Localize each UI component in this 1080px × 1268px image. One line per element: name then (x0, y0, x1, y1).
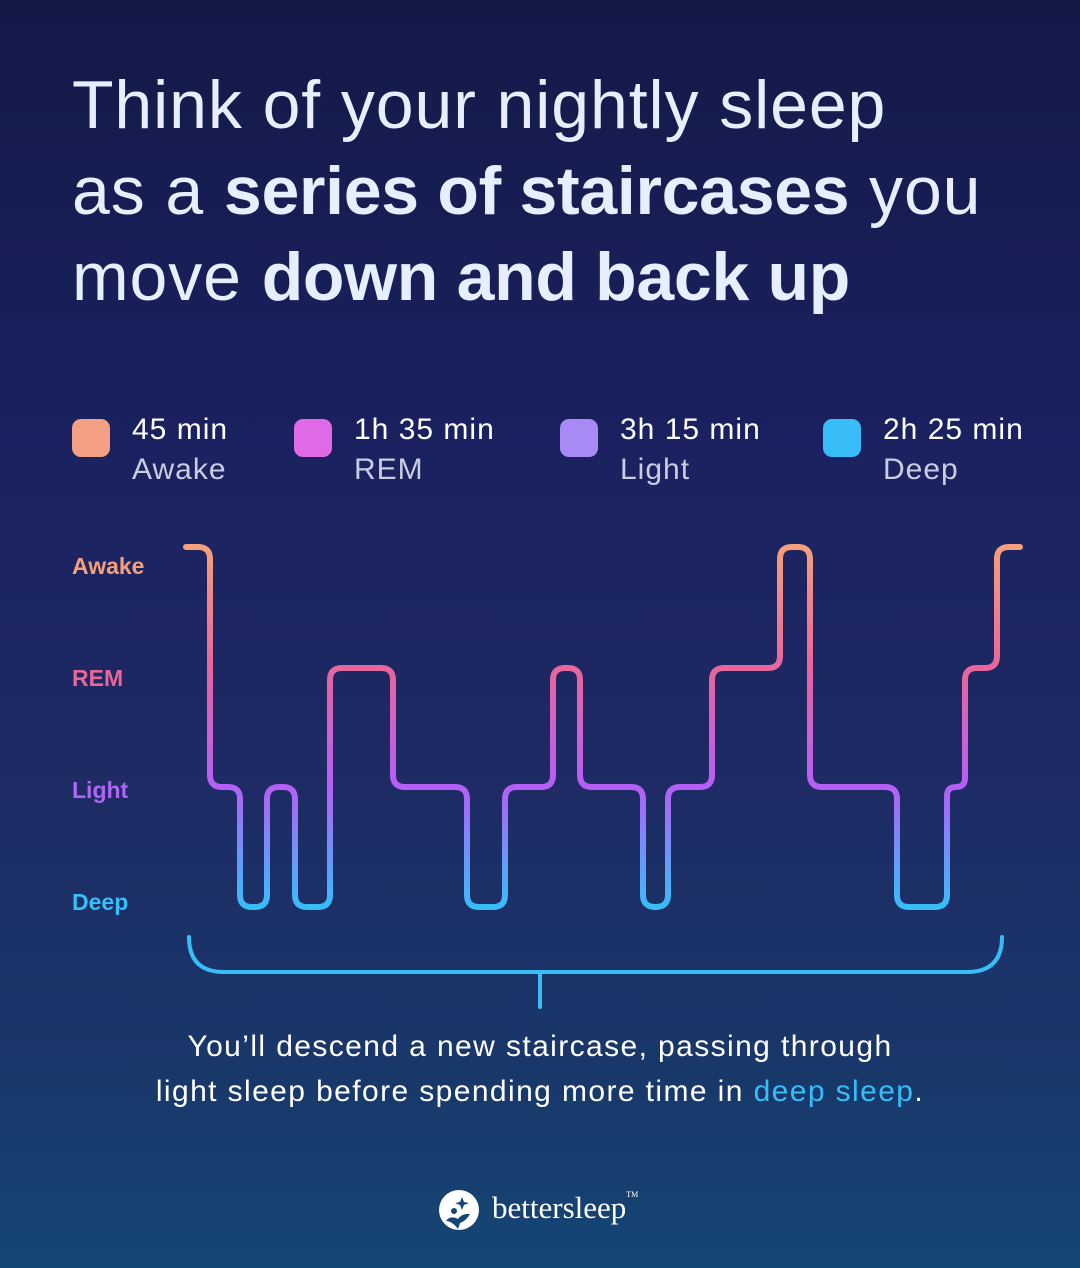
legend: deep (823, 413, 1024, 486)
legend: REM (294, 413, 495, 486)
caption (156, 1030, 924, 1108)
logo (439, 1190, 638, 1230)
axis label: awake: Awake (72, 553, 144, 579)
legend: deep: 2h 25 min (883, 413, 1024, 446)
title: Think of your nightly sleep (72, 67, 886, 143)
axis label: deep: Deep (72, 889, 128, 915)
bracket (189, 937, 1002, 1007)
icon: logo mark (439, 1190, 479, 1230)
title: as a series of staircases you (72, 153, 981, 229)
logo: bettersleepTM (492, 1190, 638, 1225)
caption: You’ll descend a new staircase, passing through (187, 1030, 893, 1063)
hypnogram line (186, 547, 1020, 907)
legend: light (560, 413, 761, 486)
legend: light: 3h 15 min (620, 413, 761, 446)
axis label: light: Light (72, 777, 128, 803)
title: move down and back up (72, 239, 850, 315)
legend: REM: REM (354, 453, 424, 486)
legend: light: Light (620, 453, 690, 486)
axis label: REM: REM (72, 665, 123, 691)
legend: awake (72, 413, 228, 486)
legend: REM: 1h 35 min (354, 413, 495, 446)
legend: awake: 45 min (132, 413, 228, 446)
legend: awake: Awake (132, 453, 227, 486)
legend: deep: Deep (883, 453, 959, 486)
title (72, 67, 981, 315)
caption: light sleep before spending more time in deep sleep. (156, 1075, 924, 1108)
